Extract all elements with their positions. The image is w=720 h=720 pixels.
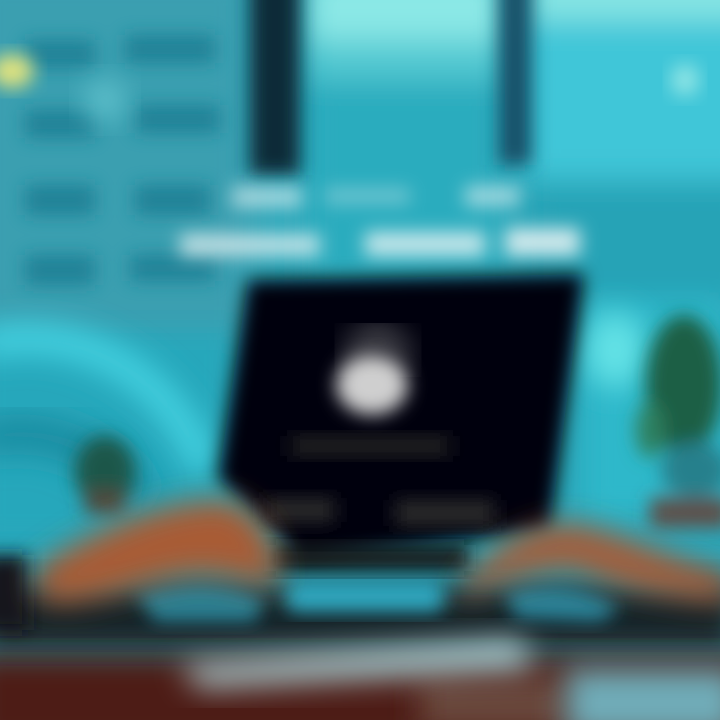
left sleeve — [0, 555, 28, 630]
screen caption — [290, 436, 450, 456]
building window rows — [25, 35, 220, 285]
laptop keyboard and dark base — [0, 545, 720, 650]
white paper on the table — [180, 638, 535, 688]
right hand — [458, 524, 720, 602]
headline: blurred white text — [180, 186, 580, 256]
window frame columns — [250, 0, 531, 175]
background: office windows — [0, 0, 720, 550]
yellow light — [0, 54, 34, 88]
keyboard glow — [265, 498, 495, 526]
table — [0, 638, 720, 720]
light arc on left — [0, 339, 205, 470]
left hand — [35, 500, 277, 603]
laptop screen — [218, 274, 584, 560]
icon: padlock — [354, 335, 402, 365]
icon: left plant — [75, 436, 135, 514]
icon: right plant — [636, 315, 720, 528]
